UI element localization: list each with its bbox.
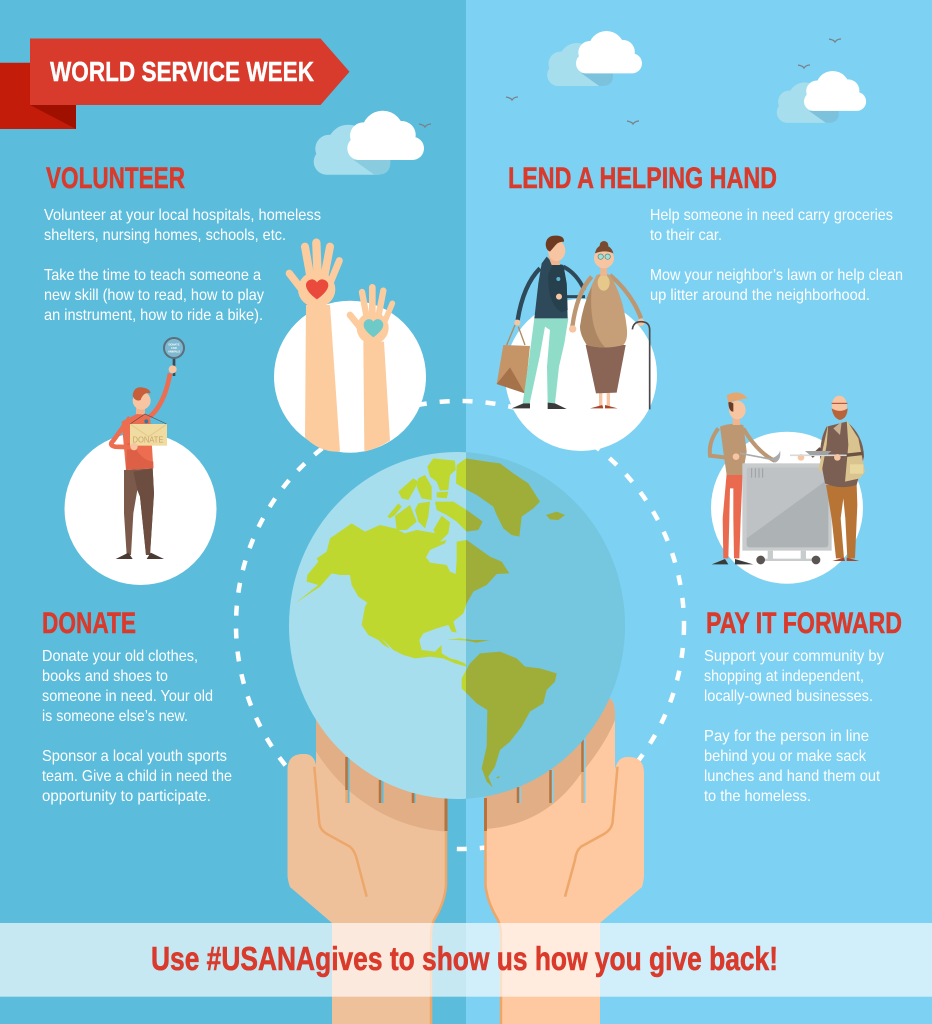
text: pay it forward: lunches and hand them out [704, 768, 881, 785]
white circle: donate [64, 433, 216, 585]
globe shadow on left hand [316, 720, 445, 832]
sign paddle [164, 338, 184, 376]
title: WORLD SERVICE WEEK [50, 56, 314, 87]
text: lend a helping hand [650, 207, 903, 304]
text: pay it forward: shopping at independent, [704, 668, 864, 685]
white circle: volunteer [274, 301, 426, 453]
birds [419, 39, 841, 127]
sign paddle: DONATE [168, 342, 180, 346]
customer [790, 396, 865, 561]
young man [512, 236, 585, 409]
text: volunteer [44, 207, 321, 324]
heading: donate: DONATE [42, 607, 136, 640]
continents east half [466, 458, 565, 788]
cook [710, 392, 780, 564]
text: donate: is someone else’s new. [42, 708, 188, 725]
figure: donate man: DONATE [132, 436, 163, 445]
white circle: pay it forward [711, 432, 863, 584]
sign paddle: ANIMALS [168, 350, 180, 354]
cloud top right [777, 71, 866, 123]
text: donate [42, 648, 232, 805]
call to action: Use #USANAgives to show us how you give back! [151, 940, 778, 977]
background left [0, 0, 466, 1024]
heading: volunteer: VOLUNTEER [46, 162, 185, 195]
ribbon banner [0, 38, 350, 129]
background right [466, 0, 932, 1024]
food cart [742, 463, 832, 564]
icon: teal heart [364, 319, 383, 337]
left hand [288, 720, 448, 1024]
text: volunteer: shelters, nursing homes, schools, etc. [44, 227, 286, 244]
cloud left [314, 111, 424, 175]
text: volunteer: Take the time to teach someone a [44, 267, 261, 284]
panel: volunteer [44, 162, 321, 324]
panel: donate [42, 607, 232, 805]
dashed ring [236, 401, 684, 849]
text: donate: opportunity to participate. [42, 788, 211, 805]
text: pay it forward: locally-owned businesses. [704, 688, 873, 705]
cloud top middle [547, 31, 642, 86]
figure: young man and old woman [497, 236, 650, 409]
cane [632, 322, 650, 409]
text: pay it forward [704, 648, 884, 805]
text: lend a helping hand: Mow your neighbor’s lawn or help clean [650, 267, 903, 284]
panel: lend a helping hand [508, 162, 903, 304]
text: donate: books and shoes to [42, 668, 168, 685]
old woman [569, 241, 645, 408]
white circle: helping hand [505, 299, 657, 451]
text: lend a helping hand: Help someone in need carry groceries [650, 207, 893, 224]
text: volunteer: Volunteer at your local hospitals, homeless [44, 207, 321, 224]
figure: donate man [111, 338, 184, 559]
text: donate: Sponsor a local youth sports [42, 748, 227, 765]
text: pay it forward: Pay for the person in line [704, 728, 869, 745]
shopping bag [497, 325, 530, 393]
text: donate: team. Give a child in need the [42, 768, 232, 785]
text: volunteer: an instrument, how to ride a bike). [44, 307, 263, 324]
text: donate: someone in need. Your old [42, 688, 213, 705]
figure: cook and customer at food cart [710, 392, 865, 564]
text: pay it forward: behind you or make sack [704, 748, 867, 765]
continents west half [295, 458, 466, 692]
text: volunteer: new skill (how to read, how to play [44, 287, 264, 304]
sign paddle: FOR [171, 346, 177, 350]
icon: raised hands with hearts [289, 243, 392, 452]
text: pay it forward: to the homeless. [704, 788, 811, 805]
text: donate: Donate your old clothes, [42, 648, 198, 665]
panel: pay it forward [704, 607, 902, 805]
text: pay it forward: Support your community by [704, 648, 884, 665]
heading: lend a helping hand: LEND A HELPING HAND [508, 162, 777, 195]
text: lend a helping hand: up litter around the neighborhood. [650, 287, 870, 304]
text: lend a helping hand: to their car. [650, 227, 722, 244]
right hand [485, 697, 644, 1024]
bottom banner [0, 923, 932, 997]
globe shadow on right hand [485, 697, 615, 829]
icon: red heart [306, 279, 328, 299]
globe [289, 452, 625, 799]
